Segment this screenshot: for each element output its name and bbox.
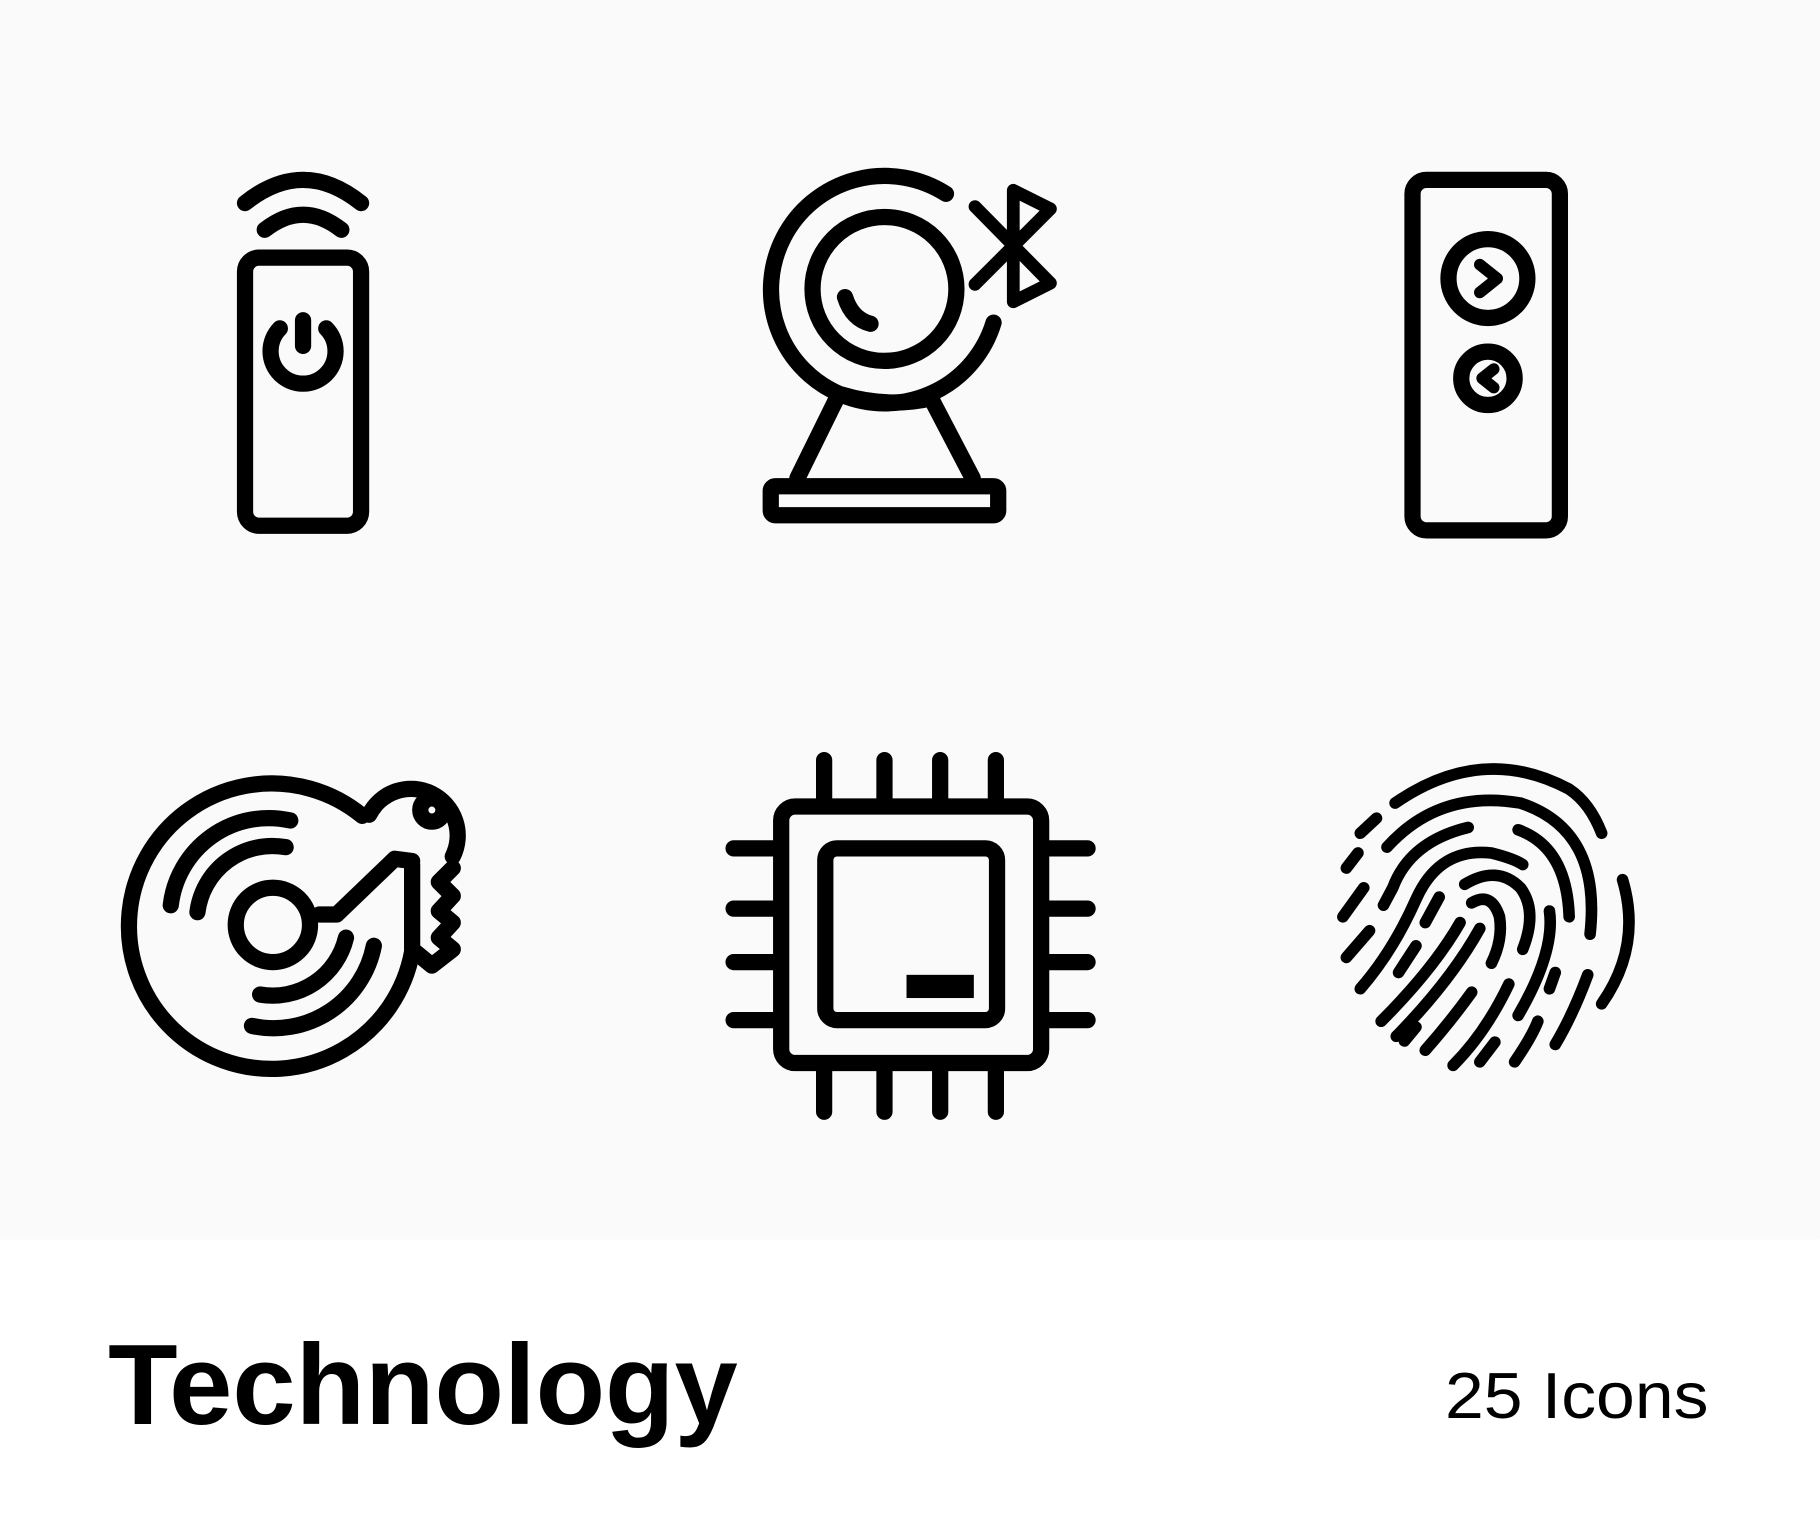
icon: microchip [734, 760, 1088, 1112]
title: Technology [108, 1322, 738, 1449]
subtitle: icon count: 25 Icons [1445, 1359, 1708, 1432]
icon: disc with key [129, 783, 458, 1069]
icon: webcam bluetooth [771, 176, 1050, 515]
icon: fingerprint [1343, 769, 1629, 1065]
icon: remote with arrows [1413, 180, 1560, 530]
icon: remote with power [245, 180, 361, 526]
